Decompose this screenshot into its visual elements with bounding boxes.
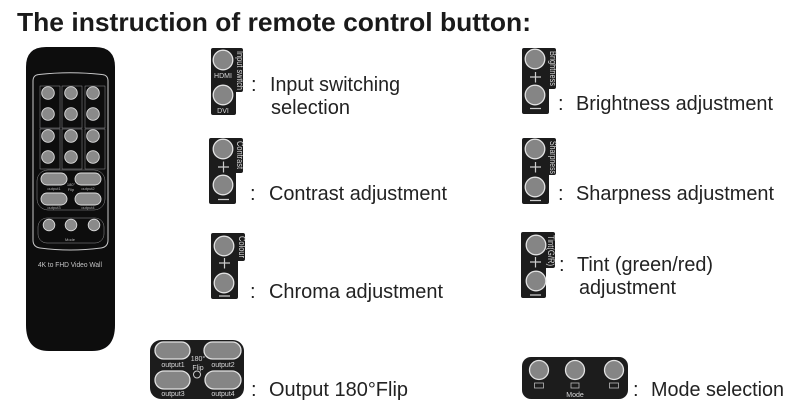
icon: remote control: 180° [67,182,76,187]
colon and label: sharpness adjustment: Sharpness adjustment [576,183,774,205]
colon and label: tint adjustment [559,254,713,299]
icon: remote control: output4 [81,205,95,210]
icon: input switch buttons: DVI [217,108,229,115]
colon and label: tint adjustment: adjustment [579,277,676,299]
icon: sharpness buttons [522,138,558,204]
colon and label: brightness adjustment: : [558,93,564,115]
icon: contrast buttons [209,138,245,204]
colon and label: output flip: Output 180°Flip [269,379,408,401]
colon and label: chroma adjustment: Chroma adjustment [269,281,443,303]
icon: output flip buttons [150,340,244,399]
icon: tint buttons: Tint(G/R) [545,235,556,266]
icon: remote control: output1 [47,186,61,191]
icon: mode buttons [522,357,628,399]
icon: colour buttons [211,233,247,299]
icon: mode buttons: Mode [566,392,584,399]
colon and label: tint adjustment: Tint (green/red) [577,254,713,276]
colon and label: mode selection: : [633,379,639,401]
icon: tint buttons [521,232,556,298]
colon and label: chroma adjustment: : [250,281,256,303]
icon: input switch buttons: Input switch [234,51,245,90]
title: The instruction of remote control button: [17,7,531,37]
icon: colour buttons: Colour [236,236,247,258]
colon and label: input switching: : [251,74,257,96]
icon: output flip buttons: Flip [192,365,204,372]
icon: sharpness buttons: Sharpness [547,141,558,174]
icon: output flip buttons: output2 [211,362,235,369]
colon and label: input switching: selection [271,97,350,119]
icon: brightness buttons: Brightness [547,51,558,86]
colon and label: input switching [251,74,400,119]
icon: remote control: Flip [68,187,75,192]
icon: remote control: 4K to FHD Video Wall [38,262,102,269]
colon and label: tint adjustment: : [559,254,565,276]
colon and label: input switching: Input switching [270,74,400,96]
icon: remote control [26,47,115,351]
colon and label: contrast adjustment: Contrast adjustment [269,183,447,205]
icon: input switch buttons: HDMI [214,73,232,80]
colon and label: output flip: : [251,379,257,401]
icon: output flip buttons: output1 [161,362,185,369]
colon and label: contrast adjustment: : [250,183,256,205]
colon and label: sharpness adjustment: : [558,183,564,205]
icon: output flip buttons: output4 [211,391,235,398]
colon and label: brightness adjustment: Brightness adjustment [576,93,773,115]
colon and label: mode selection: Mode selection [651,379,784,401]
icon: remote control: Mode [65,237,76,242]
icon: remote control: output2 [81,186,95,191]
icon: contrast buttons: Contrast [234,141,245,169]
icon: remote control: output3 [47,205,61,210]
icon: output flip buttons: output3 [161,391,185,398]
icon: brightness buttons [522,48,558,114]
icon: input switch buttons [211,48,245,115]
icon: output flip buttons: 180° [191,355,205,363]
